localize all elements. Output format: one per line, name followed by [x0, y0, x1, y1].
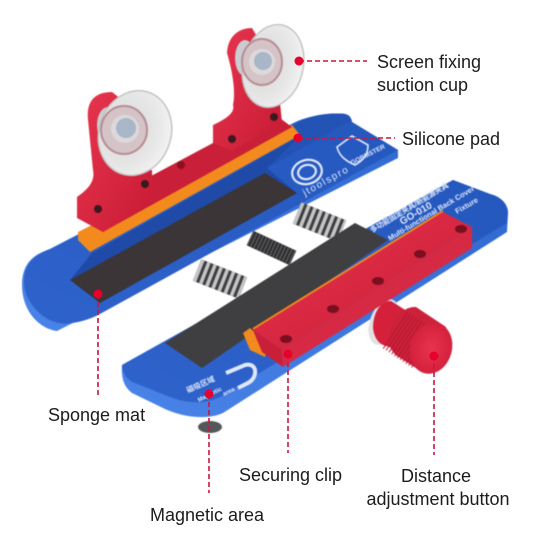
orange silicone pad [78, 125, 300, 252]
callout: screen fixing suction cup: suction cup [377, 75, 468, 95]
callout: distance adjustment button: Distance [401, 466, 471, 486]
rear sponge mat [70, 173, 297, 303]
plate text: GO-010 [398, 200, 435, 228]
callout: silicone pad: Silicone pad [402, 129, 500, 149]
suction cups [87, 18, 312, 185]
callout: distance adjustment button [366, 352, 510, 509]
clip holes [280, 225, 467, 343]
callout: sponge mat [48, 290, 145, 425]
left spring [197, 270, 243, 288]
plate text: Fixture [454, 195, 480, 216]
brand text: GOBMSTER [350, 143, 387, 167]
callout: silicone pad [294, 129, 500, 149]
callout: securing clip: Securing clip [239, 465, 342, 485]
brand text: jtoolspro [300, 165, 351, 199]
callout: sponge mat: Sponge mat [48, 405, 145, 425]
magnetic area text: area [222, 387, 236, 398]
stem [373, 301, 418, 350]
knob [363, 295, 458, 379]
rear red bar and brackets [77, 28, 292, 232]
springs [197, 213, 342, 288]
magnetic area text: 磁吸区域 [185, 373, 217, 395]
magnetic area text [185, 373, 236, 404]
left suction cup [87, 81, 183, 185]
plate text: Multi-functional Back Cover [386, 184, 476, 243]
icon: magnet [226, 365, 255, 388]
screw holes [94, 113, 278, 213]
icon: jtoolspro logo [289, 157, 325, 187]
right suction cup [234, 18, 312, 114]
washer [363, 295, 405, 349]
middle threaded rod [250, 238, 293, 258]
knurled body [389, 307, 446, 373]
fixture body [22, 18, 508, 433]
rubber foot [198, 421, 222, 433]
callout: magnetic area [150, 390, 265, 525]
callout: securing clip [239, 350, 342, 485]
front sponge mat [165, 223, 388, 368]
right bracket [213, 28, 282, 151]
knob face [404, 317, 458, 379]
callout: screen fixing suction cup [294, 52, 481, 95]
plate text: 多功能固定夹具/新能源夹具 [368, 180, 451, 235]
callout: distance adjustment button: adjustment button [366, 489, 510, 509]
front red securing clip [243, 211, 472, 367]
left bracket [77, 92, 153, 232]
right spring [297, 213, 342, 231]
rear blue plate [22, 113, 398, 331]
icon: shield [337, 136, 368, 165]
front blue plate [122, 180, 508, 417]
magnetic area text: Magnetic [197, 386, 224, 404]
callout: screen fixing suction cup: Screen fixing [377, 52, 481, 72]
callout: magnetic area: Magnetic area [150, 505, 265, 525]
orange tab [243, 328, 268, 357]
